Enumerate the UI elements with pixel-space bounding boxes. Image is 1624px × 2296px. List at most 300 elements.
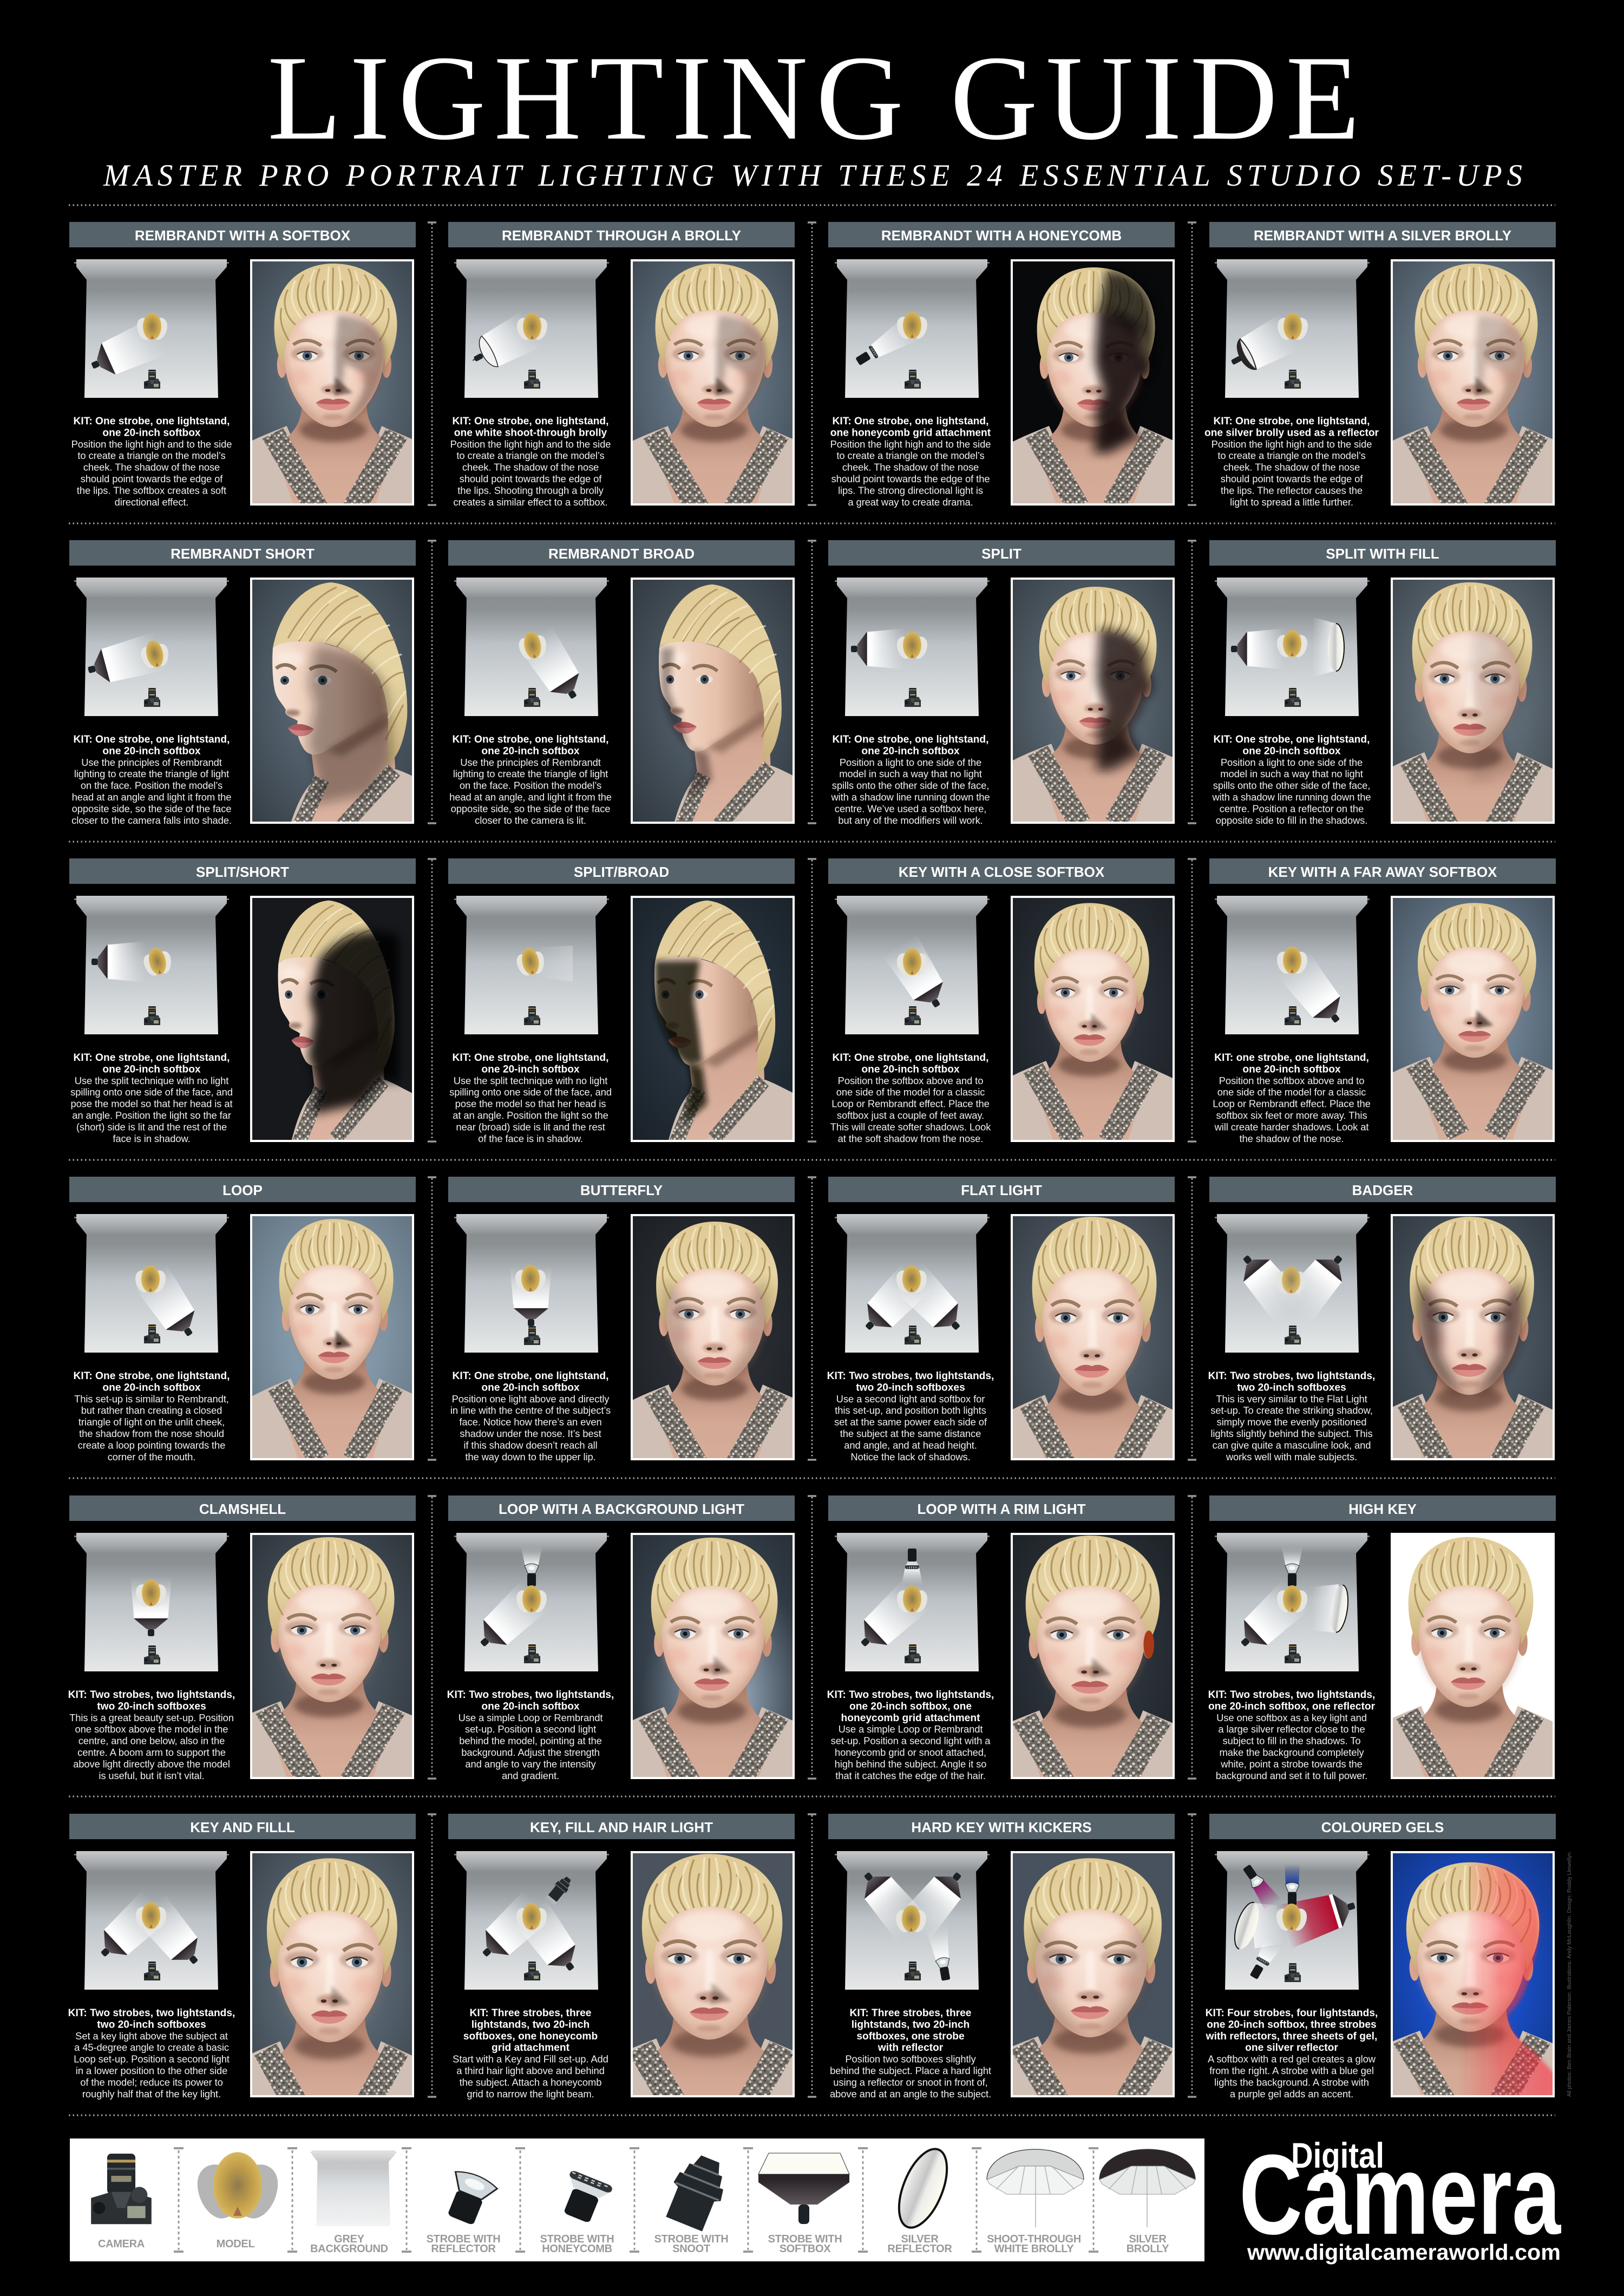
lighting diagram (1215, 578, 1370, 716)
photo credits: All photos: Ben Brain and James Paterson. Illustrations: Andy McLaughlin. Design: Roddy Llewellyn (1566, 1852, 1573, 2097)
description: centre. We’ve used a softbox here, (835, 803, 986, 814)
heading (828, 1495, 1175, 1521)
description: honeycomb grid or snoot attached, (835, 1747, 986, 1758)
description: one 20-inch softbox (861, 745, 960, 757)
description: Position one light above and directly (452, 1393, 610, 1405)
portrait photo (963, 1851, 1223, 2195)
subtitle: MASTER PRO PORTRAIT LIGHTING WITH THESE 24 ESSENTIAL STUDIO SET-UPS (103, 159, 1522, 193)
description: head at an angle and light it from the (72, 791, 231, 803)
legend labels: REFLECTOR (431, 2243, 496, 2255)
description: KIT: Three strobes, three (850, 2008, 972, 2019)
description: one 20-inch softbox (102, 427, 201, 438)
legend labels: MODEL (217, 2238, 254, 2250)
legend labels: BROLLY (1127, 2243, 1169, 2255)
heading (1209, 858, 1556, 884)
legend labels: STROBE WITH (654, 2233, 728, 2245)
heading: REMBRANDT BROAD (548, 546, 695, 562)
panel: Key with a far away softbox (1209, 858, 1589, 1195)
description: corner of the mouth. (108, 1451, 195, 1462)
portrait photo (601, 259, 833, 572)
portrait photo (977, 1214, 1212, 1554)
heading: REMBRANDT WITH A SOFTBOX (135, 227, 351, 244)
description: lights slightly behind the subject. This (1210, 1428, 1373, 1439)
description: one 20-inch softbox (481, 745, 580, 757)
description: should point towards the edge of (460, 473, 602, 484)
description: simply move the evenly positioned (1217, 1416, 1366, 1428)
description: honeycomb grid attachment (841, 1713, 980, 1724)
description: Use a second light and softbox for (836, 1393, 985, 1405)
description: This is a great beauty set-up. Position (69, 1712, 234, 1723)
heading: SPLIT (981, 546, 1021, 562)
description: centre. Position a reflector on the (1220, 803, 1364, 814)
description: opposite side, so the side of the face (451, 803, 610, 814)
heading: HIGH KEY (1348, 1501, 1417, 1517)
heading (828, 1177, 1175, 1202)
description: one 20-inch softbox (102, 1064, 201, 1075)
description: a large silver reflector close to the (1218, 1723, 1365, 1735)
description: Use the principles of Rembrandt (460, 757, 601, 768)
description: background. Adjust the strength (461, 1747, 600, 1758)
heading (1209, 1495, 1556, 1521)
panel: Loop with a background light (447, 1495, 834, 1859)
heading (1209, 1177, 1556, 1202)
heading (448, 1177, 795, 1202)
heading: SPLIT/SHORT (196, 864, 289, 880)
description: centre, and one below, also in the (78, 1735, 225, 1747)
description: Position the softbox above and to (1219, 1075, 1364, 1086)
heading: BUTTERFLY (580, 1182, 663, 1198)
description: lips. The strong directional light is (838, 484, 983, 496)
description: Position two softboxes slightly (845, 2054, 977, 2065)
description: will create harder shadows. Look at (1214, 1121, 1368, 1132)
description: create a loop pointing towards the (78, 1439, 225, 1451)
description: background and set it to full power. (1216, 1770, 1367, 1781)
description: Use a simple Loop or Rembrandt (839, 1723, 983, 1735)
description: above light directly above the model (73, 1758, 230, 1769)
description: behind the subject. Place a hard light (830, 2065, 991, 2076)
description: on the face. Position the model’s (460, 780, 601, 791)
description: a great way to create drama. (848, 496, 973, 508)
description: with reflectors, three sheets of gel, (1206, 2031, 1377, 2042)
description: the lips. The reflector causes the (1221, 484, 1363, 496)
description: set at the same power each side of (834, 1416, 987, 1428)
icon: strobe with honeycomb (555, 2170, 613, 2227)
heading: REMBRANDT WITH A SILVER BROLLY (1254, 227, 1511, 244)
description: directional effect. (115, 496, 188, 508)
description: KIT: one strobe, one lightstand, (1214, 1052, 1369, 1064)
description: at an angle. Position the light so the (453, 1110, 608, 1121)
description: a 45-degree angle to create a basic (74, 2042, 229, 2053)
description: triangle of light on the unlit cheek, (78, 1416, 225, 1428)
panel: Rembrandt with a silver brolly (1204, 222, 1593, 572)
description: Notice the lack of shadows. (850, 1451, 971, 1462)
legend labels: STROBE WITH (427, 2233, 500, 2245)
description: model in such a way that no light (1220, 768, 1363, 779)
description: and angle to vary the intensity (465, 1758, 597, 1769)
description: softbox just a couple of feet away. (837, 1110, 984, 1121)
description: one 20-inch softbox (102, 1382, 201, 1393)
heading (69, 858, 416, 884)
description: from the right. A strobe with a blue gel (1209, 2065, 1374, 2076)
description: Loop or Rembrandt effect. Place the (831, 1098, 990, 1110)
heading (828, 858, 1175, 884)
description: the shadow of the nose. (1240, 1133, 1344, 1144)
description: Position the light high and to the side (830, 438, 991, 450)
panel: Rembrandt with a honeycomb (828, 222, 1208, 568)
description: KIT: Two strobes, two lightstands, (1208, 1370, 1375, 1382)
description: pose the model so that her head is at (71, 1098, 232, 1110)
description: KIT: One strobe, one lightstand, (74, 416, 230, 427)
heading: LOOP WITH A BACKGROUND LIGHT (499, 1501, 744, 1517)
description: near (broad) side is lit and the rest (456, 1121, 605, 1132)
description: one side of the model for a classic (836, 1086, 985, 1098)
lighting diagram (74, 1851, 229, 1990)
portrait photo (1360, 259, 1593, 572)
description: one side of the model for a classic (1217, 1086, 1366, 1098)
description: KIT: One strobe, one lightstand, (833, 734, 988, 745)
heading (448, 1495, 795, 1521)
heading: LOOP (222, 1182, 263, 1198)
portrait photo (631, 896, 800, 1228)
lighting diagram (454, 1533, 609, 1671)
description: This is very similar to the Flat Light (1216, 1393, 1367, 1405)
description: KIT: Two strobes, two lightstands, (447, 1689, 614, 1701)
portrait photo (212, 1533, 451, 1848)
description: at the soft shadow from the nose. (838, 1133, 983, 1144)
lighting diagram (454, 1851, 609, 1990)
description: Position the light high and to the side (71, 438, 232, 450)
portrait photo (228, 1214, 444, 1521)
heading: HARD KEY WITH KICKERS (911, 1819, 1092, 1835)
lighting diagram (1215, 259, 1370, 398)
heading: BADGER (1352, 1182, 1413, 1198)
heading: SPLIT/BROAD (574, 864, 669, 880)
description: a third hair light above and behind (456, 2065, 605, 2076)
panel: Coloured gels (1206, 1814, 1599, 2181)
description: one 20-inch softbox (861, 1064, 960, 1075)
description: to create a triangle on the model’s (456, 450, 605, 461)
legend labels: SNOOT (672, 2243, 710, 2255)
portrait photo (987, 578, 1209, 884)
heading: KEY WITH A FAR AWAY SOFTBOX (1268, 864, 1497, 880)
heading (1209, 540, 1556, 566)
description: Use the principles of Rembrandt (81, 757, 222, 768)
portrait photo (250, 578, 434, 924)
description: KIT: One strobe, one lightstand, (74, 1052, 230, 1064)
description: KIT: Four strobes, four lightstands, (1206, 2008, 1378, 2019)
description: creates a similar effect to a softbox. (453, 496, 608, 508)
description: above and at an angle to the subject. (830, 2088, 991, 2100)
description: the lips. Shooting through a brolly (457, 484, 604, 496)
description: one honeycomb grid attachment (830, 427, 991, 438)
legend labels: SOFTBOX (780, 2243, 831, 2255)
heading (828, 1814, 1175, 1839)
portrait photo (250, 896, 418, 1228)
description: high behind the subject. Angle it so (835, 1758, 986, 1769)
lighting diagram (1215, 1851, 1370, 1990)
description: cheek. The shadow of the nose (842, 462, 979, 473)
panel: Rembrandt with a softbox (69, 222, 452, 572)
legend labels: SHOOT-THROUGH (987, 2233, 1081, 2245)
description: should point towards the edge of (81, 473, 223, 484)
panel: equipment legend (70, 2138, 1204, 2261)
legend labels: STROBE WITH (768, 2233, 842, 2245)
description: set-up. Position a second light with a (831, 1735, 991, 1747)
heading: KEY AND FILLL (190, 1819, 295, 1835)
lighting diagram (454, 1214, 609, 1353)
panel: Split (828, 540, 1209, 884)
description: with a shadow line running down the (1212, 791, 1371, 803)
description: Position a light to one side of the (840, 757, 981, 768)
description: KIT: One strobe, one lightstand, (453, 1052, 608, 1064)
description: of the face is in shadow. (478, 1133, 583, 1144)
description: two 20-inch softboxes (97, 1701, 206, 1712)
description: grid attachment (492, 2042, 570, 2054)
legend labels: CAMERA (98, 2238, 145, 2250)
lighting diagram (74, 259, 229, 398)
description: KIT: One strobe, one lightstand, (74, 1370, 230, 1382)
description: and gradient. (502, 1770, 559, 1781)
legend labels (98, 2233, 1169, 2255)
lighting diagram (835, 1533, 990, 1671)
description: KIT: Two strobes, two lightstands, (1208, 1689, 1375, 1701)
panel: Flat light (827, 1177, 1212, 1554)
legend labels: SILVER (1129, 2233, 1167, 2245)
description: lighting to create the triangle of light (74, 768, 229, 779)
panel: Split/broad (448, 858, 800, 1228)
description: one silver reflector (1245, 2042, 1338, 2054)
heading: SPLIT WITH FILL (1326, 546, 1439, 562)
description: two 20-inch softboxes (97, 2019, 206, 2030)
description: subject to fill in the shadows. To (1223, 1735, 1360, 1747)
icon: strobe with snoot (660, 2149, 734, 2234)
description: KIT: One strobe, one lightstand, (1214, 416, 1370, 427)
description: Position a light to one side of the (1221, 757, 1363, 768)
description: roughly half that of the key light. (82, 2088, 221, 2100)
panel: Key and fill (68, 1814, 455, 2205)
description: Use the split technique with no light (75, 1075, 228, 1086)
description: one 20-inch softbox, one (849, 1701, 972, 1712)
description: to create a triangle on the model’s (77, 450, 226, 461)
description: to create a triangle on the model’s (836, 450, 985, 461)
heading: COLOURED GELS (1321, 1819, 1444, 1835)
description: centre. A boom arm to support the (77, 1747, 226, 1758)
description: the way down to the upper lip. (465, 1451, 596, 1462)
lighting diagram (454, 259, 609, 398)
description: one 20-inch softbox (481, 1701, 580, 1712)
description: cheek. The shadow of the nose (1223, 462, 1360, 473)
description: face. Notice how there’s an even (459, 1416, 602, 1428)
portrait photo (631, 578, 806, 916)
description: KIT: One strobe, one lightstand, (1214, 734, 1370, 745)
description: softboxes, one strobe (856, 2031, 965, 2042)
panel: Rembrandt through a brolly (448, 222, 833, 572)
description: KIT: One strobe, one lightstand, (453, 416, 608, 427)
portrait photo (966, 1533, 1220, 1867)
description: the subject at the same distance (840, 1428, 981, 1439)
description: should point towards the edge of the (831, 473, 990, 484)
description: Use the split technique with no light (454, 1075, 607, 1086)
panel: Loop (69, 1177, 444, 1521)
description: KIT: One strobe, one lightstand, (453, 1370, 608, 1382)
heading (448, 540, 795, 566)
portrait photo (603, 1214, 832, 1530)
description: opposite side, so the side of the face (72, 803, 231, 814)
description: KIT: Two strobes, two lightstands, (827, 1370, 994, 1382)
description: make the background completely (1220, 1747, 1364, 1758)
lighting diagram (74, 1214, 229, 1353)
description: set-up. To create the striking shadow, (1210, 1405, 1373, 1416)
description: KIT: Three strobes, three (470, 2008, 592, 2019)
description: light to spread a little further. (1230, 496, 1353, 508)
description: Use one softbox as a key light and (1216, 1712, 1367, 1723)
portrait photo (595, 1533, 834, 1859)
icon: model (198, 2152, 278, 2219)
heading (828, 222, 1175, 247)
description: A softbox with a red gel creates a glow (1208, 2054, 1376, 2065)
description: Set a key light above the subject at (75, 2030, 228, 2042)
legend labels: REFLECTOR (887, 2243, 952, 2255)
legend labels: HONEYCOMB (542, 2243, 612, 2255)
description: but any of the modifiers will work. (838, 815, 983, 826)
description: one 20-inch softbox, one reflector (1208, 1701, 1376, 1712)
description: with a shadow line running down the (830, 791, 990, 803)
description: KIT: Two strobes, two lightstands, (68, 2008, 235, 2019)
lighting diagram (454, 896, 609, 1034)
description: the shadow from the nose should (79, 1428, 224, 1439)
heading (69, 540, 416, 566)
description: spilling onto one side of the face, and (449, 1086, 612, 1098)
description: using a reflector or snoot in front of, (833, 2076, 988, 2088)
description: one 20-inch softbox (481, 1064, 580, 1075)
heading: KEY WITH A CLOSE SOFTBOX (899, 864, 1105, 880)
lighting diagram (1215, 896, 1370, 1034)
description: can give quite a masculine look, and (1213, 1439, 1371, 1451)
panel: Loop with a rim light (827, 1495, 1220, 1867)
description: an angle. Position the light so the far (72, 1110, 231, 1121)
description: one silver brolly used as a reflector (1204, 427, 1379, 438)
panel: Key, fill and hair light (448, 1814, 845, 2203)
description: in line with the centre of the subject’s (450, 1405, 611, 1416)
portrait photo (209, 1851, 455, 2205)
description: set-up. Position a second light (465, 1723, 596, 1735)
heading: REMBRANDT WITH A HONEYCOMB (881, 227, 1122, 244)
description: Use a simple Loop or Rembrandt (459, 1712, 603, 1723)
description: one 20-inch softbox (1242, 745, 1341, 757)
portrait photo (984, 896, 1200, 1202)
description: lighting to create the triangle of light (453, 768, 608, 779)
portrait photo (1354, 1214, 1589, 1552)
panel: High key (1208, 1495, 1589, 1857)
panel: Split/short (69, 858, 418, 1228)
description: softboxes, one honeycomb (463, 2031, 598, 2042)
icon: shoot-through white brolly (987, 2149, 1084, 2227)
description: this set-up, and position both lights (835, 1405, 986, 1416)
portrait photo (1359, 578, 1586, 904)
description: if this shadow doesn’t reach all (463, 1439, 598, 1451)
description: KIT: Two strobes, two lightstands, (827, 1689, 994, 1701)
description: KIT: One strobe, one lightstand, (833, 416, 988, 427)
lighting diagram (1215, 1214, 1370, 1353)
description: the lips. The softbox creates a soft (77, 484, 226, 496)
description: spills onto the other side of the face, (1213, 780, 1370, 791)
heading (1209, 1814, 1556, 1839)
icon: grey background (311, 2150, 396, 2226)
description: spilling onto one side of the face, and (70, 1086, 233, 1098)
description: This set-up is similar to Rembrandt, (74, 1393, 229, 1405)
heading: REMBRANDT THROUGH A BROLLY (502, 227, 741, 244)
description: This will create softer shadows. Look (830, 1121, 991, 1132)
lighting diagram (835, 1214, 990, 1353)
description: one white shoot-through brolly (454, 427, 607, 438)
portrait photo (985, 259, 1208, 568)
heading (448, 1814, 795, 1839)
lighting diagram (835, 1851, 990, 1990)
title: LIGHTING GUIDE (267, 31, 1360, 165)
description: that it catches the edge of the hair. (835, 1770, 986, 1781)
lighting diagram (74, 1533, 229, 1671)
legend labels: BACKGROUND (310, 2243, 388, 2255)
heading: CLAMSHELL (199, 1501, 286, 1517)
heading (1209, 222, 1556, 247)
icon: strobe with reflector (440, 2168, 499, 2229)
description: to create a triangle on the model’s (1217, 450, 1366, 461)
description: Start with a Key and Fill set-up. Add (453, 2054, 608, 2065)
panel: Key with a close softbox (828, 858, 1200, 1202)
description: Loop or Rembrandt effect. Place the (1213, 1098, 1371, 1110)
description: Loop set-up. Position a second light (74, 2054, 230, 2065)
description: one softbox above the model in the (75, 1723, 228, 1735)
lighting diagram (835, 896, 990, 1034)
description: lightstands, two 20-inch (472, 2019, 590, 2030)
heading: REMBRANDT SHORT (171, 546, 315, 562)
heading (69, 222, 416, 247)
description: Position the light high and to the side (450, 438, 611, 450)
description: works well with male subjects. (1226, 1451, 1357, 1462)
description: cheek. The shadow of the nose (83, 462, 220, 473)
heading: KEY, FILL AND HAIR LIGHT (530, 1819, 713, 1835)
description: closer to the camera is lit. (475, 815, 586, 826)
portrait photo (1353, 1533, 1589, 1857)
description: spills onto the other side of the face, (832, 780, 989, 791)
description: one 20-inch softbox, three strobes (1207, 2019, 1377, 2030)
description: one 20-inch softbox (1242, 1064, 1341, 1075)
description: is useful, but it isn’t vital. (99, 1770, 205, 1781)
description: closer to the camera falls into shade. (71, 815, 232, 826)
legend labels: WHITE BROLLY (994, 2243, 1074, 2255)
description: one 20-inch softbox (102, 745, 201, 757)
description: behind the model, pointing at the (459, 1735, 602, 1747)
heading: LOOP WITH A RIM LIGHT (917, 1501, 1086, 1517)
panel: Butterfly (448, 1177, 832, 1530)
portrait photo (1365, 896, 1589, 1195)
lighting diagram (1215, 1533, 1370, 1671)
description: KIT: One strobe, one lightstand, (453, 734, 608, 745)
description: of the model; reduce its power to (80, 2076, 223, 2088)
description: one 20-inch softbox (481, 1382, 580, 1393)
description: should point towards the edge of (1221, 473, 1363, 484)
portrait photo (1347, 1851, 1599, 2181)
legend labels: STROBE WITH (540, 2233, 614, 2245)
description: the subject. Attach a honeycomb (460, 2076, 601, 2088)
description: white, point a strobe towards the (1220, 1758, 1363, 1769)
description: cheek. The shadow of the nose (462, 462, 599, 473)
icon: strobe with softbox (758, 2153, 849, 2224)
icon: camera (91, 2154, 152, 2224)
heading (69, 1177, 416, 1202)
lighting diagram (74, 578, 229, 716)
panel: Clamshell (68, 1495, 451, 1848)
